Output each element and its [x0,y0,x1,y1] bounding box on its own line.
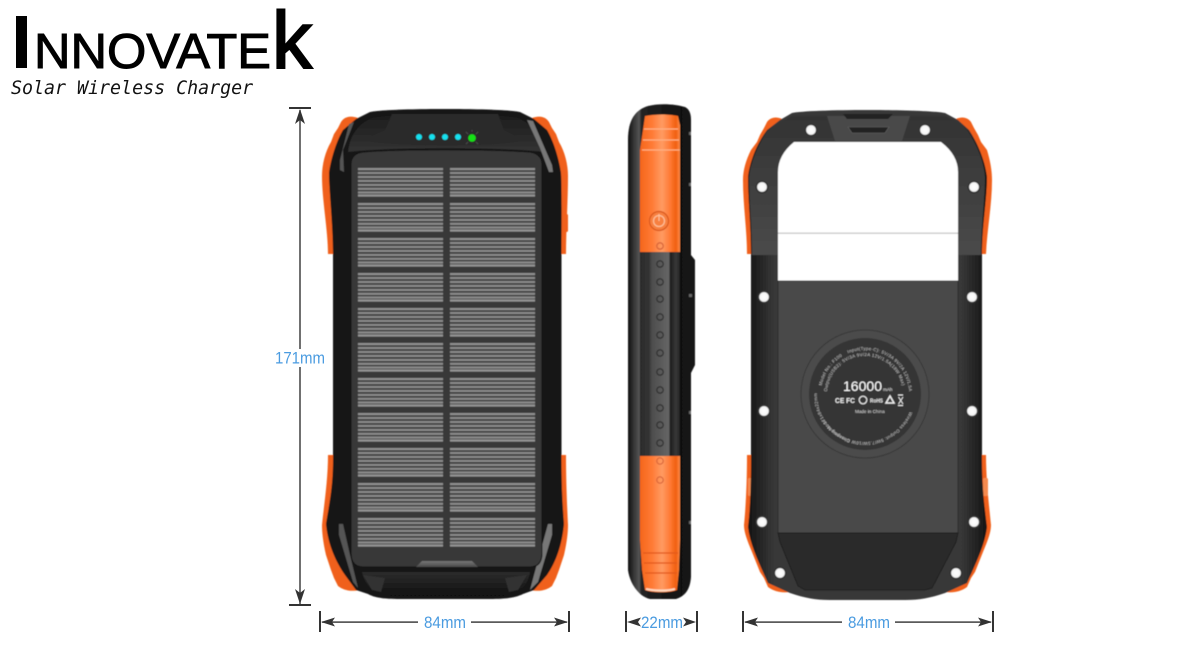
curved spec text: Dimensions: 171x84x22mm [814,392,850,443]
wireless charging rating label [800,330,930,458]
bottom notch [416,561,478,567]
side indicator dots [657,243,663,446]
top cap with raised section [348,114,544,152]
bottom dark trapezoid [778,533,958,590]
back view of charger [742,109,993,601]
bottom cap shading [362,572,530,596]
wireless charging rating label: RoHS [870,398,883,404]
side view of charger [628,104,695,599]
dimension: front width 84mm: 84mm [424,613,466,632]
capacity: 16000 [843,379,882,394]
top frame shading [749,116,985,255]
curved spec text: Output(USB2): 5V/3A 9V/2A 12V/1.5A(18W Max) [823,352,906,392]
curved spec text: Model No.: F100 [818,354,842,386]
logo: Innovatek [16,0,312,86]
top ridges [642,129,680,150]
origin line: Made in China [855,409,885,414]
dimension: side width 22mm [625,611,698,632]
dimension: height 171mm [274,107,326,606]
logo: Innovatek: NNOVATE [34,25,271,79]
curved spec text: Input(Type-C): 5V/3A 9V/2A 12V/1.5A [846,346,912,392]
dimension: height 171mm: 171mm [275,350,325,368]
curved spec text [814,346,913,446]
capacity unit: mAh [883,387,893,392]
bottom orange bumper [640,456,680,592]
top notch and port [827,114,910,141]
dimension: back width 84mm [742,611,994,632]
white cut-out window [778,142,958,282]
screws [756,124,980,580]
solar panel [351,150,542,567]
side body shell [628,104,695,599]
window divider line [778,233,958,234]
certification marks: CE FC [835,396,856,405]
side grip section [640,252,680,456]
dimension: back width 84mm: 84mm [848,613,890,632]
front view of charger [322,109,568,599]
silver side trims, front [339,120,553,590]
bottom cap wedges [363,575,527,592]
dimension: side width 22mm: 22mm [641,613,683,632]
lower back panel [778,281,958,533]
curved spec text: Wireless Output: 5W/7.5W/10W Charging Mode [822,412,913,446]
back body shell [748,110,987,600]
dimension: front width 84mm [319,611,570,632]
top orange bumper [640,114,680,252]
front body shell [326,109,564,599]
orange corner bumpers, back [743,118,992,592]
subtitle: Solar Wireless Charger [11,78,253,99]
side edge clips [689,132,692,524]
orange corner bumpers, front [322,117,568,591]
status LEDs [416,130,478,144]
solar cells, 11 rows by 2 columns [358,168,535,547]
power button [650,212,668,230]
bottom ridges and dots [643,458,678,590]
